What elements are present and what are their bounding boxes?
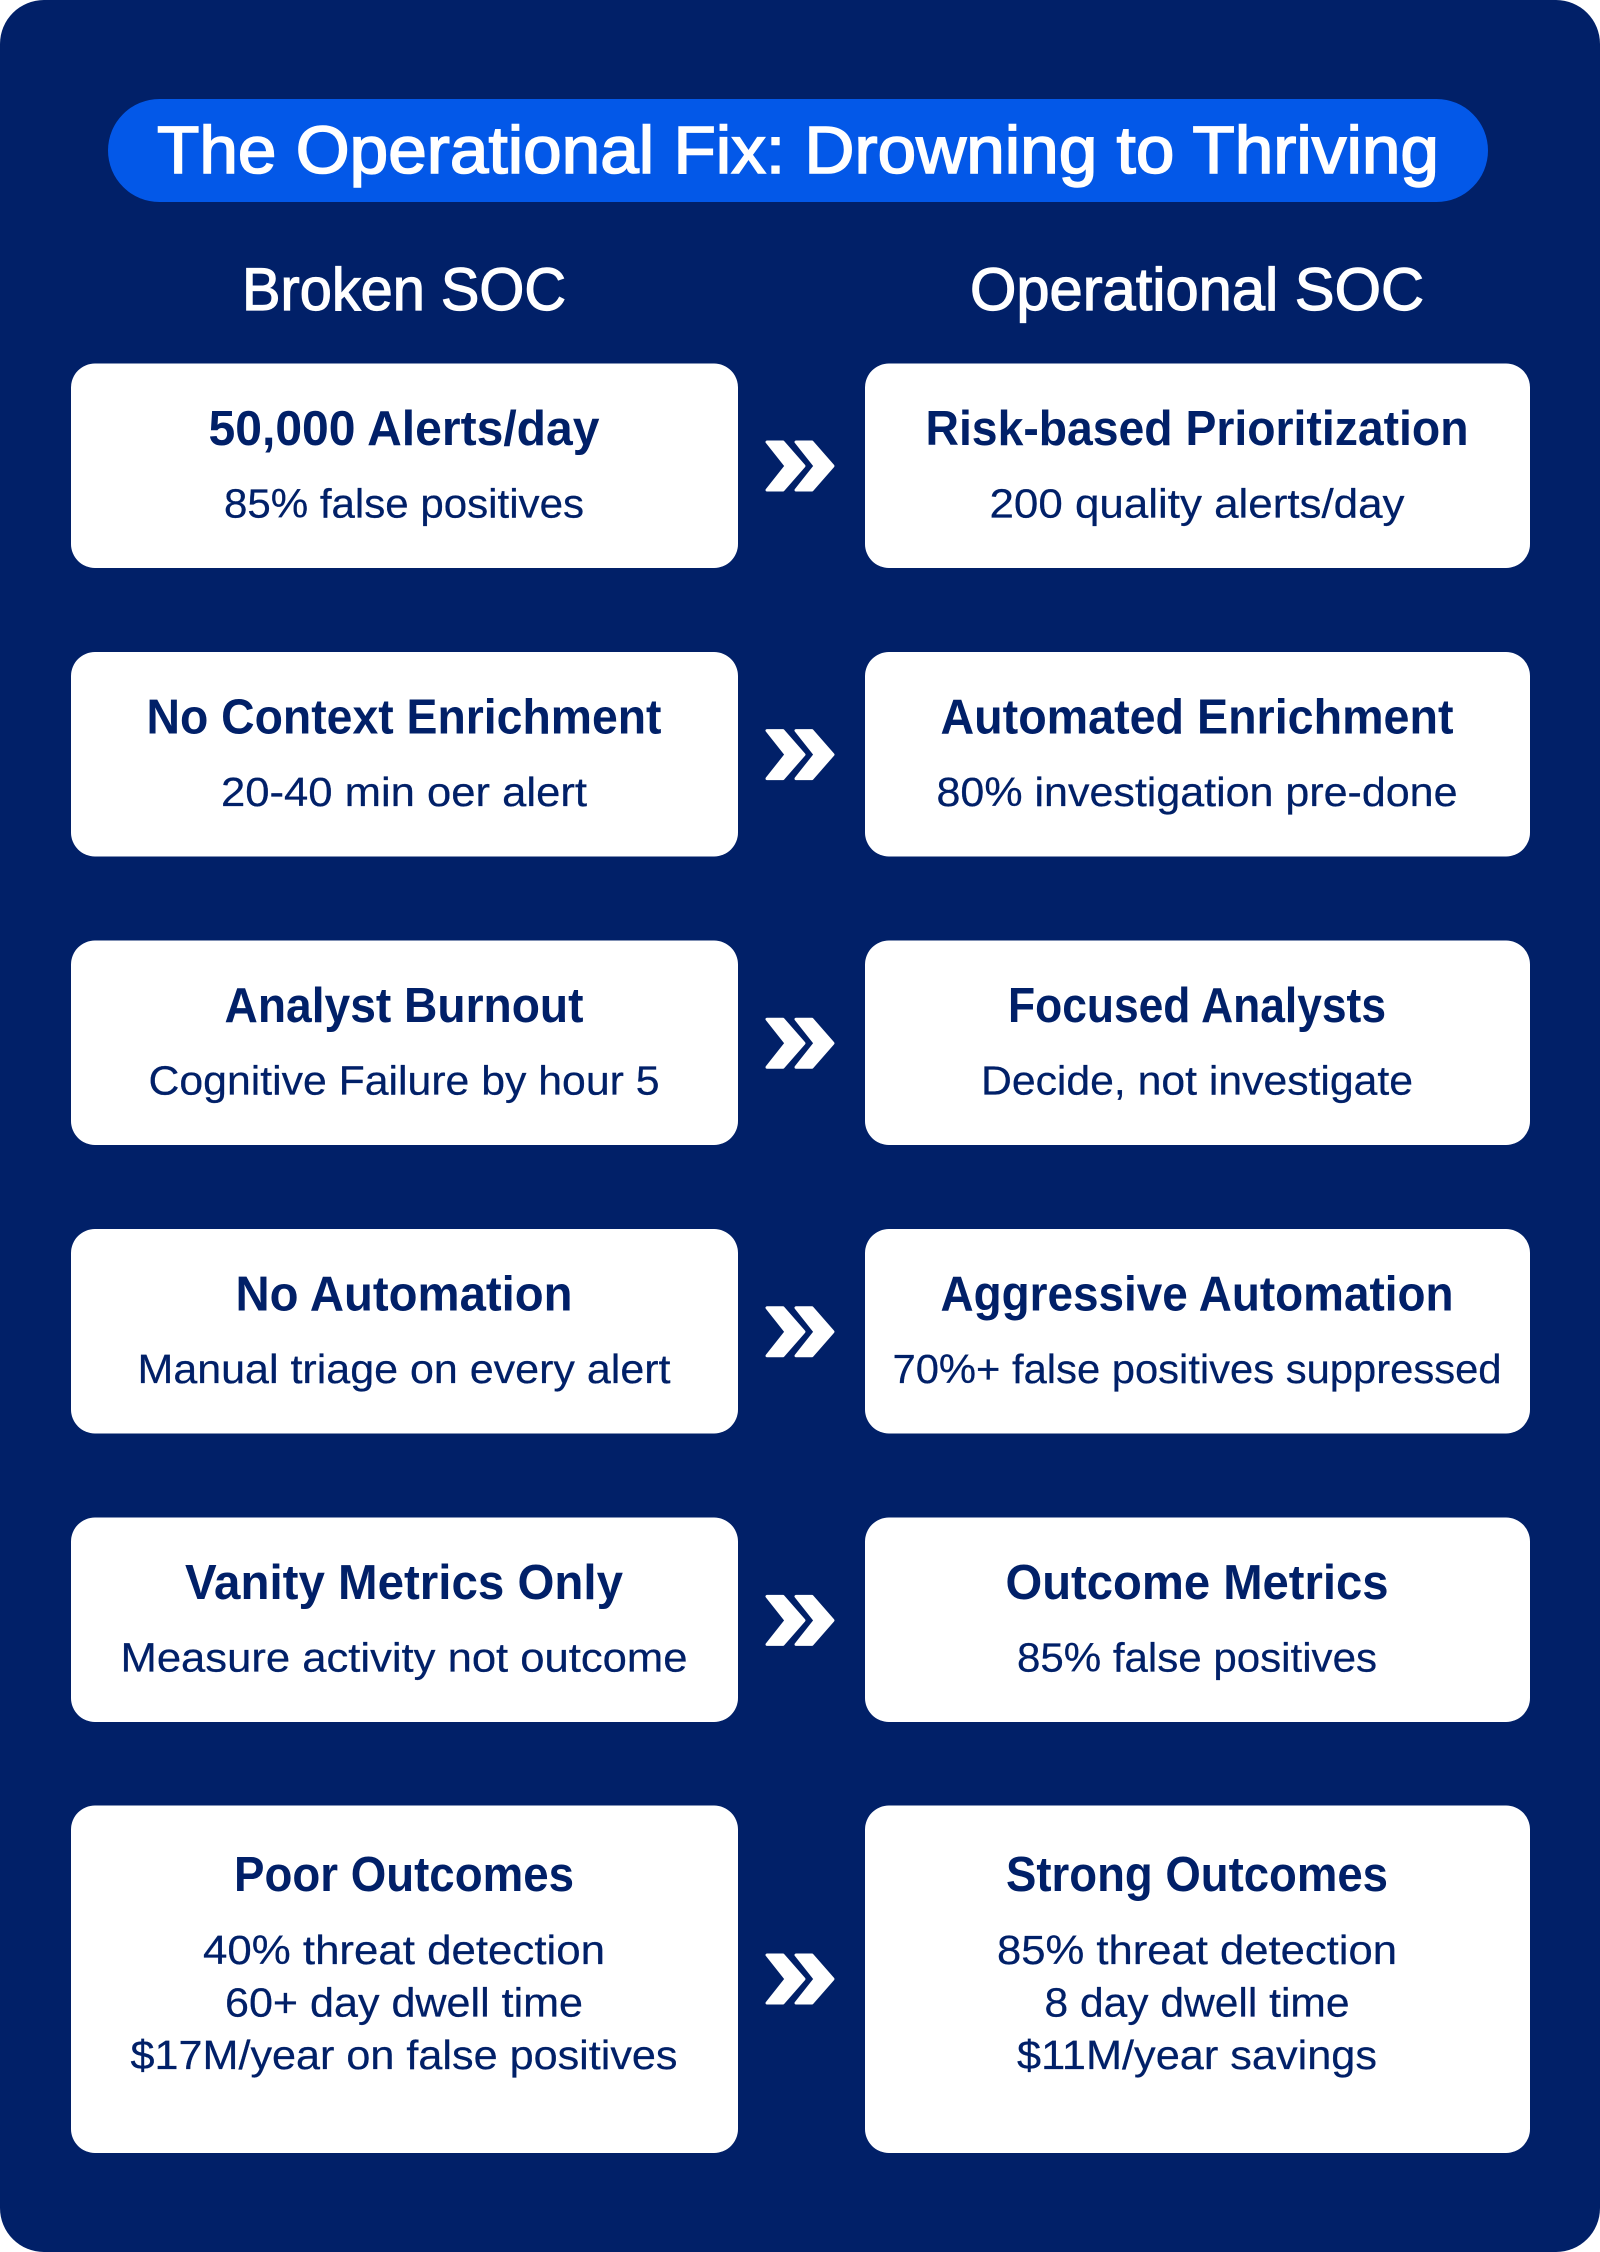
row 2 right card: Automated Enrichment	[940, 690, 1454, 744]
column heading: Operational SOC: Operational SOC	[970, 256, 1424, 323]
row 1 left card	[71, 364, 738, 568]
row 6 right card: 8 day dwell time	[1044, 1980, 1350, 2026]
row 1 left card: 85% false positives	[224, 480, 584, 526]
row 6 left card: 60+ day dwell time	[225, 1980, 583, 2026]
title pill: The Operational Fix: Drowning to Thriving	[157, 113, 1439, 188]
row 5 arrow	[767, 1596, 833, 1644]
row 3 left card: Cognitive Failure by hour 5	[148, 1058, 660, 1104]
row 1 left card: 50,000 Alerts/day	[208, 402, 600, 456]
row 6 left card: 40% threat detection	[203, 1927, 605, 1973]
row 3 arrow	[767, 1019, 833, 1067]
row 4 right card	[865, 1229, 1530, 1434]
row 1 right card: 200 quality alerts/day	[990, 480, 1405, 526]
row 2 left card	[71, 652, 738, 856]
row 6 left card: $17M/year on false positives	[130, 2032, 678, 2078]
row 6 right card: Strong Outcomes	[1006, 1848, 1388, 1902]
row 6 right card: 85% threat detection	[997, 1927, 1397, 1973]
row 4 arrow	[767, 1308, 833, 1356]
row 2 left card: 20-40 min oer alert	[221, 769, 588, 815]
row 2 left card: No Context Enrichment	[146, 690, 662, 744]
row 3 right card: Focused Analysts	[1008, 979, 1386, 1033]
row 6 arrow	[767, 1955, 833, 2003]
row 4 left card	[71, 1229, 738, 1434]
row 1 arrow	[767, 442, 833, 490]
row 2 right card: 80% investigation pre-done	[936, 769, 1458, 815]
row 5 left card	[71, 1518, 738, 1722]
row 5 left card: Vanity Metrics Only	[185, 1556, 623, 1610]
row 4 right card: Aggressive Automation	[940, 1268, 1454, 1322]
row 3 left card: Analyst Burnout	[224, 979, 584, 1033]
row 6 left card	[71, 1806, 738, 2153]
row 4 left card: Manual triage on every alert	[138, 1346, 671, 1392]
row 2 right card	[865, 652, 1530, 856]
row 4 left card: No Automation	[236, 1268, 572, 1322]
row 6 right card: $11M/year savings	[1017, 2032, 1377, 2078]
column heading: Broken SOC: Broken SOC	[242, 256, 566, 323]
row 1 right card: Risk-based Prioritization	[926, 402, 1468, 456]
row 4 right card: 70%+ false positives suppressed	[892, 1346, 1502, 1392]
row 3 left card	[71, 940, 738, 1145]
row 2 arrow	[767, 731, 833, 779]
row 5 right card	[865, 1518, 1530, 1722]
row 3 right card	[865, 940, 1530, 1145]
row 5 right card: Outcome Metrics	[1006, 1556, 1388, 1610]
row 5 left card: Measure activity not outcome	[120, 1634, 688, 1680]
row 1 right card	[865, 364, 1530, 568]
row 6 left card: Poor Outcomes	[234, 1848, 574, 1902]
row 3 right card: Decide, not investigate	[981, 1058, 1413, 1104]
row 5 right card: 85% false positives	[1017, 1634, 1377, 1680]
row 6 right card	[865, 1806, 1530, 2153]
title pill	[108, 99, 1488, 202]
